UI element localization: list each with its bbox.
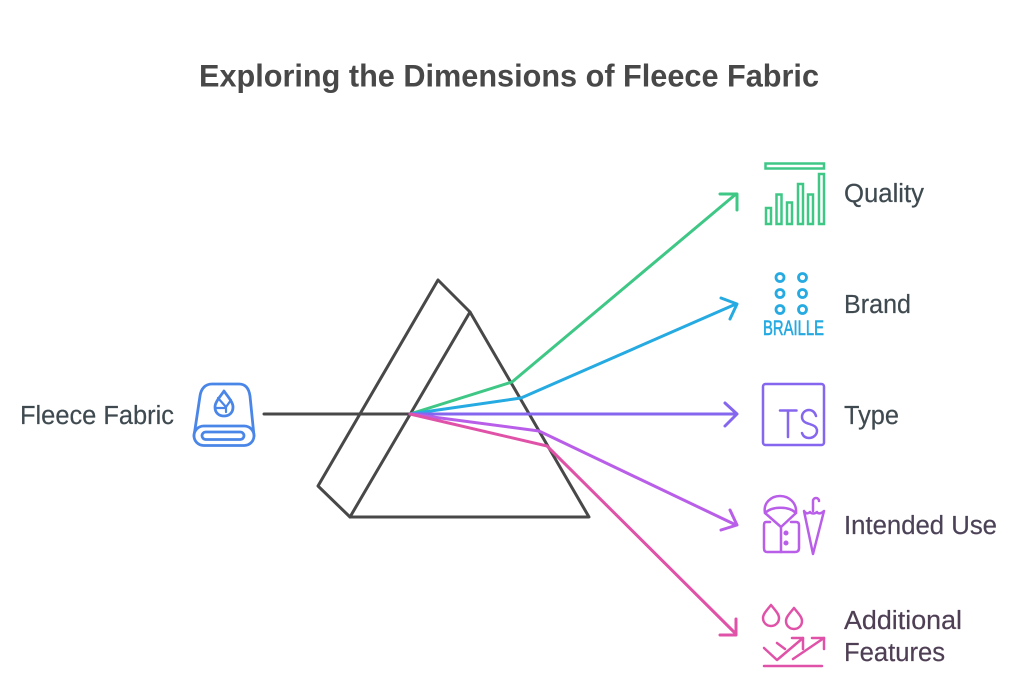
icon: TS box <box>763 384 824 445</box>
icon: fleece blanket <box>194 384 254 446</box>
label: Brand: Brand <box>844 291 911 319</box>
arrow: intended use <box>410 414 737 530</box>
arrow: brand <box>410 298 737 414</box>
arrow: additional features <box>410 414 736 635</box>
label: Fleece Fabric: Fleece Fabric <box>20 402 174 430</box>
arrow: quality <box>410 194 737 414</box>
icon: braille: BRAILLE <box>763 317 824 340</box>
prism <box>318 280 589 517</box>
label: Quality: Quality <box>844 180 924 208</box>
icon: braille <box>763 274 824 340</box>
label: Additional Features <box>844 607 962 667</box>
icon: quality bars <box>766 164 824 224</box>
label: Intended Use: Intended Use <box>844 512 997 540</box>
icon: drops and arrows <box>763 605 824 666</box>
title: Exploring the Dimensions of Fleece Fabric <box>199 58 819 94</box>
icon: raincoat and umbrella <box>764 496 824 554</box>
label: Additional Features: Features <box>844 639 945 667</box>
label: Type: Type <box>844 402 899 430</box>
incoming beam <box>264 412 410 416</box>
arrow: type <box>410 403 737 426</box>
label: Additional Features: Additional <box>844 607 962 635</box>
